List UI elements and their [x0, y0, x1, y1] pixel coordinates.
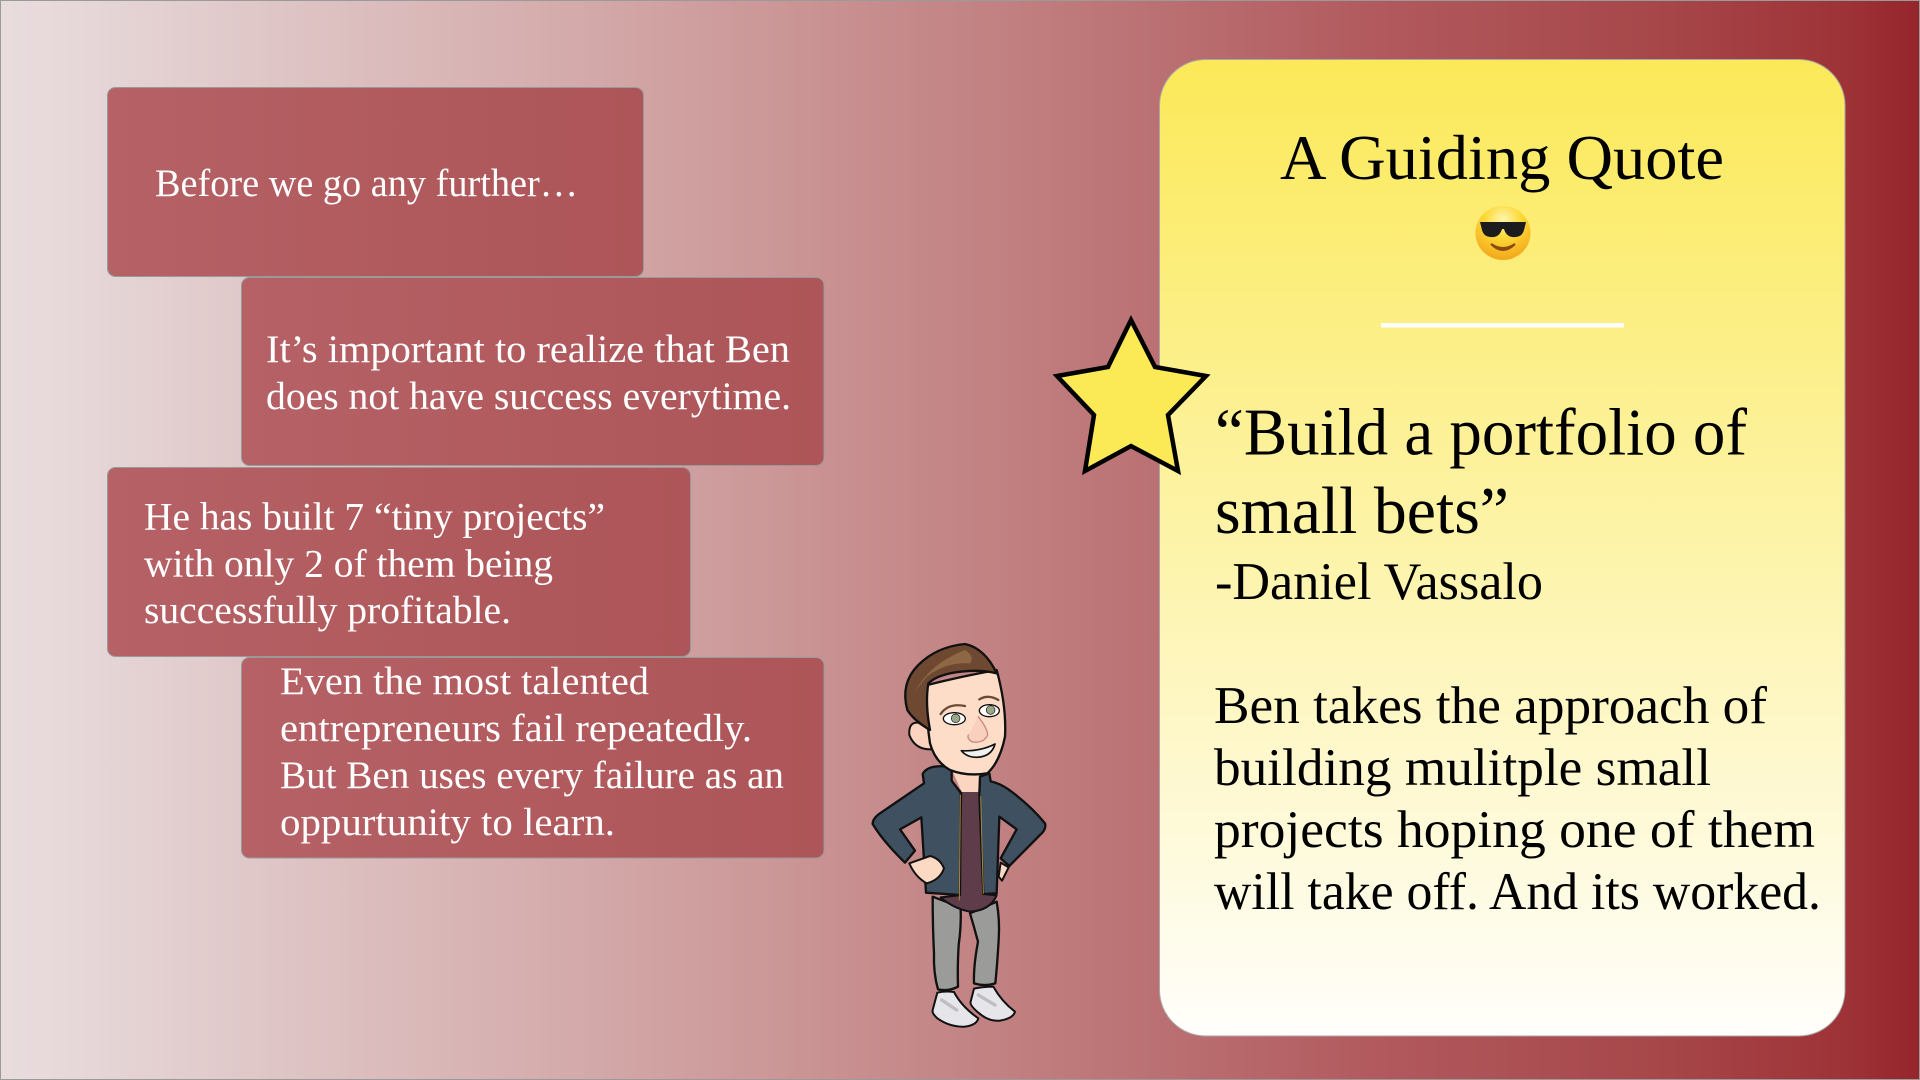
panel: success not every time: does not have success everytime. [266, 375, 791, 418]
avatar neck [952, 769, 979, 792]
icon: cartoon avatar [873, 644, 1045, 1027]
panel: before we go any further: Before we go any further… [155, 162, 578, 205]
avatar eyebrows [941, 697, 998, 714]
avatar hands [909, 856, 1009, 883]
panel: seven tiny projects [108, 468, 690, 656]
quote attribution: -Daniel Vassalo [1215, 553, 1543, 611]
avatar nose [968, 717, 988, 742]
avatar face [927, 670, 1005, 774]
panel: seven tiny projects: He has built 7 “tiny projects” [144, 496, 605, 538]
panel: seven tiny projects: successfully profitable. [144, 589, 511, 632]
avatar shirt [941, 791, 997, 912]
avatar ear [909, 723, 932, 749]
quote: “Build a portfolio of [1215, 396, 1748, 470]
icon: sunglasses emoji [1476, 206, 1530, 260]
panel: seven tiny projects: with only 2 of them being [144, 542, 553, 586]
panel: entrepreneurs fail repeatedly [242, 658, 824, 858]
avatar legs [933, 897, 999, 990]
avatar smile [961, 744, 995, 757]
body text: will take off. And its worked. [1214, 863, 1821, 921]
quote [1215, 396, 1748, 548]
avatar eyes [943, 705, 999, 725]
avatar hoodie [873, 766, 1045, 895]
panel: before we go any further [108, 88, 644, 276]
heading: A Guiding Quote [1280, 122, 1724, 193]
body text: projects hoping one of them [1214, 801, 1815, 859]
avatar hair [905, 644, 997, 730]
body text: Ben takes the approach of [1214, 677, 1767, 735]
panel: entrepreneurs fail repeatedly: But Ben uses every failure as an [280, 754, 784, 797]
quote: small bets” [1215, 474, 1509, 548]
panel: success not every time: It’s important to realize that Ben [266, 328, 790, 371]
panel: entrepreneurs fail repeatedly: Even the most talented [280, 660, 650, 703]
panel: success not every time [242, 278, 824, 466]
icon: star [1057, 320, 1206, 471]
panel: entrepreneurs fail repeatedly: entrepreneurs fail repeatedly. [280, 707, 752, 750]
panel: guiding quote card [1160, 60, 1845, 1036]
body text [1214, 677, 1821, 921]
avatar zipper [959, 795, 983, 900]
avatar shoes [933, 987, 1015, 1027]
panel: entrepreneurs fail repeatedly: oppurtunity to learn. [280, 801, 615, 844]
body text: building mulitple small [1214, 739, 1711, 797]
